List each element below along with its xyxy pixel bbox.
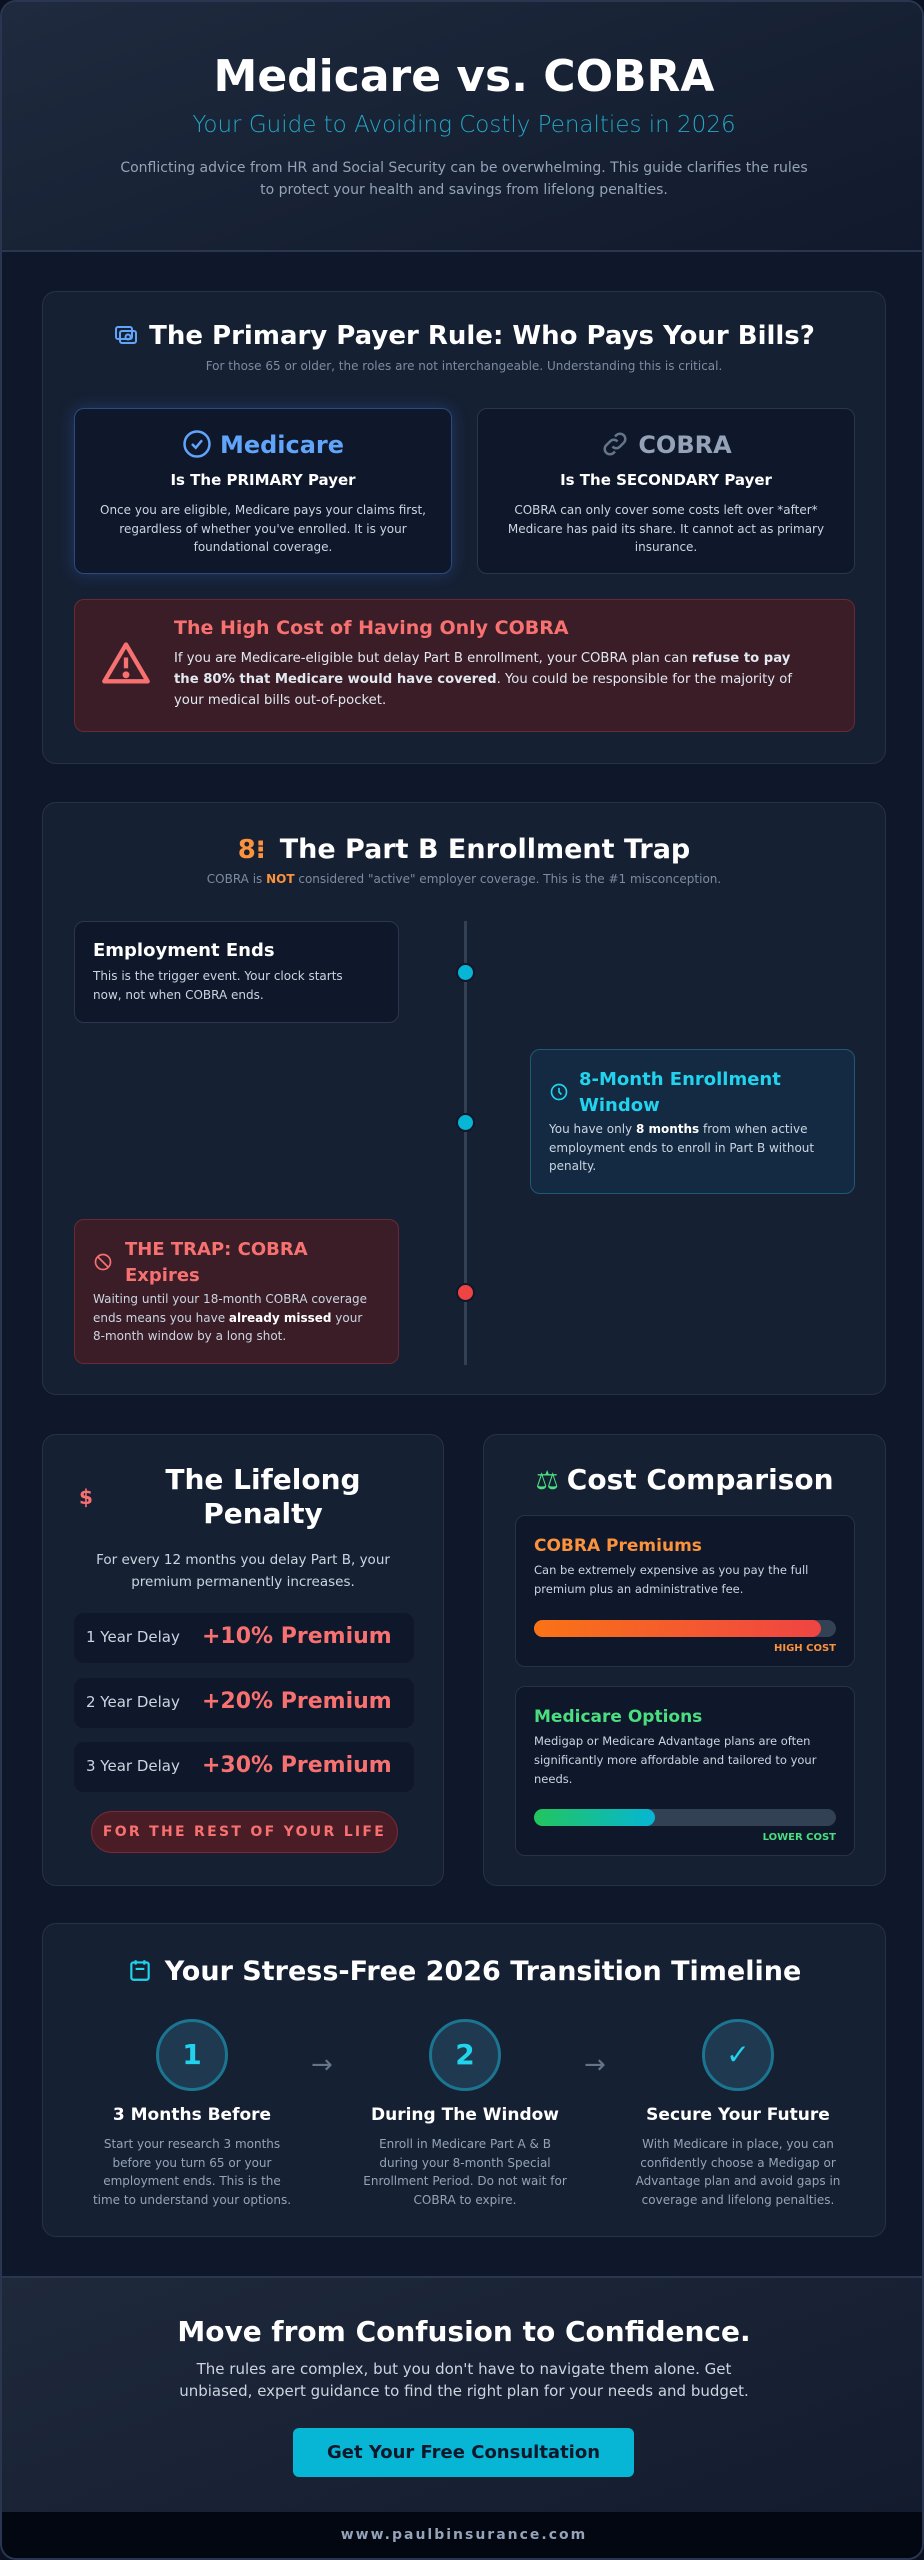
footer [2,2512,924,2560]
card: the trap: Waiting until your 18-month COBRA coverage ends means you have already missed your 8‑month window by a long shot. [93,1292,367,1343]
panel: lifelong penalty [42,1434,444,1886]
card: medicare: Once you are eligible, Medicare pays your claims first, regardless of whether you've enrolled. It is your foundational coverage. [100,503,426,554]
callout: high cost warning [74,599,855,732]
subheading: COBRA is NOT considered "active" employer coverage. This is the #1 misconception. [207,872,721,886]
card: cobra [477,408,855,574]
panel: part b enrollment trap [42,802,886,1395]
step 3: Secure Your Future [646,2105,830,2125]
cta heading: Move from Confusion to Confidence. [177,2315,751,2348]
pill: rest of life: FOR THE REST OF YOUR LIFE [103,1824,386,1840]
row 1: 1 Year Delay [86,1628,180,1646]
card: cobra premiums [515,1515,855,1667]
arrow 2: → [584,2050,606,2080]
row 2: 2 Year Delay [86,1693,180,1711]
card: cobra premiums: HIGH COST [774,1643,836,1654]
dot 2 [456,1113,475,1132]
card: medicare options [515,1686,855,1856]
card: cobra: COBRA can only cover some costs left over *after* Medicare has paid its share. It cannot act as primary insurance. [508,503,824,554]
card: 8-month window [530,1049,855,1194]
row 1: +10% Premium [202,1624,392,1649]
cta text: The rules are complex, but you don't have to navigate them alone. Get unbiased, expert guidance to find the right plan for your needs and budget. [179,2360,749,2400]
card: 8-month window: 8-Month Enrollment [579,1069,781,1090]
header [2,2,924,252]
dot 1 [456,963,475,982]
panel: primary payer rule [42,291,886,764]
step 2: During The Window [371,2105,559,2125]
card: medicare [74,408,452,574]
intro text [120,160,808,198]
arrow 1: → [311,2050,333,2080]
description: For every 12 months you delay Part B, your premium permanently increases. [96,1552,390,1590]
heading: The Lifelong [165,1463,361,1496]
row 3 [74,1742,414,1792]
card: cobra: Is The SECONDARY Payer [560,471,772,489]
panel: transition timeline [42,1923,886,2237]
row 2 [74,1678,414,1728]
card: the trap: Expires [125,1265,200,1286]
heading [165,1463,361,1530]
callout: high cost warning: The High Cost of Having Only COBRA [174,617,569,639]
pill: rest of life [91,1811,398,1853]
heading: ⚖ Cost Comparison [535,1463,834,1496]
row 1 [74,1613,414,1663]
dot 3 [456,1283,475,1302]
title: Medicare vs. COBRA [214,51,714,102]
card: employment ends [74,921,399,1023]
icon: dollar: $ [79,1485,93,1509]
card: medicare: Medicare [220,431,344,459]
card: cobra premiums: COBRA Premiums [534,1536,702,1556]
step 1: Start your research 3 months before you turn 65 or your employment ends. This is the time to understand your options. [93,2137,291,2206]
card: cobra premiums: Can be extremely expensive as you pay the full premium plus an administrative fee. [534,1563,808,1596]
row 3: 3 Year Delay [86,1757,180,1775]
card: employment ends: Employment Ends [93,940,275,961]
timeline line [464,921,467,1365]
callout: high cost warning: If you are Medicare-eligible but delay Part B enrollment, your COBRA plan can refuse to pay the 80% that Medicare would have covered. You could be responsible for the majority of your medical bills out-of-pocket. [174,651,792,708]
row 2: +20% Premium [202,1689,392,1714]
intro text: to protect your health and savings from lifelong penalties. [260,182,668,198]
card: 8-month window: Window [579,1095,660,1116]
row 3: +30% Premium [202,1753,392,1778]
subheading: For those 65 or older, the roles are not interchangeable. Understanding this is critical. [206,359,722,373]
step 1 [93,2019,291,2206]
heading: Penalty [203,1497,323,1530]
footer: www.paulbinsurance.com [341,2527,587,2543]
button [293,2428,634,2477]
card: 8-month window: You have only 8 months from when active employment ends to enroll in Part B without penalty. [549,1122,814,1173]
card: medicare: Is The PRIMARY Payer [170,471,356,489]
heading: Your Stress-Free 2026 Transition Timeline [165,1956,801,1987]
icon: warning [102,642,150,684]
button: Get Your Free Consultation [327,2442,600,2463]
step 3: ✓ [726,2038,750,2071]
step 2 [363,2019,567,2206]
card: the trap: THE TRAP: COBRA [125,1239,308,1260]
step 1: 1 [182,2038,202,2071]
heading: The Primary Payer Rule: Who Pays Your Bills? [149,321,815,351]
card: the trap [74,1219,399,1364]
step 2: 2 [455,2038,475,2071]
cta section [2,2276,924,2512]
card: medicare options: Medigap or Medicare Advantage plans are often significantly more affordable and tailored to your needs. [534,1734,816,1786]
panel: cost comparison [483,1434,886,1886]
subtitle: Your Guide to Avoiding Costly Penalties in 2026 [192,112,736,138]
card: employment ends: This is the trigger event. Your clock starts now, not when COBRA ends. [93,969,343,1002]
intro text: Conflicting advice from HR and Social Security can be overwhelming. This guide clarifies the rules [120,160,808,176]
card: medicare options: LOWER COST [763,1832,836,1843]
step 1: 3 Months Before [113,2105,271,2125]
step 2: Enroll in Medicare Part A & B during your 8-month Special Enrollment Period. Do not wait for COBRA to expire. [363,2137,567,2206]
step 3: With Medicare in place, you can confidently choose a Medigap or Advantage plan and avoid gaps in coverage and lifelong penalties. [636,2137,840,2206]
card: cobra: COBRA [638,431,732,459]
heading: 8⁝ The Part B Enrollment Trap [238,834,690,865]
card: medicare options: Medicare Options [534,1707,702,1727]
step 3 [636,2019,840,2206]
